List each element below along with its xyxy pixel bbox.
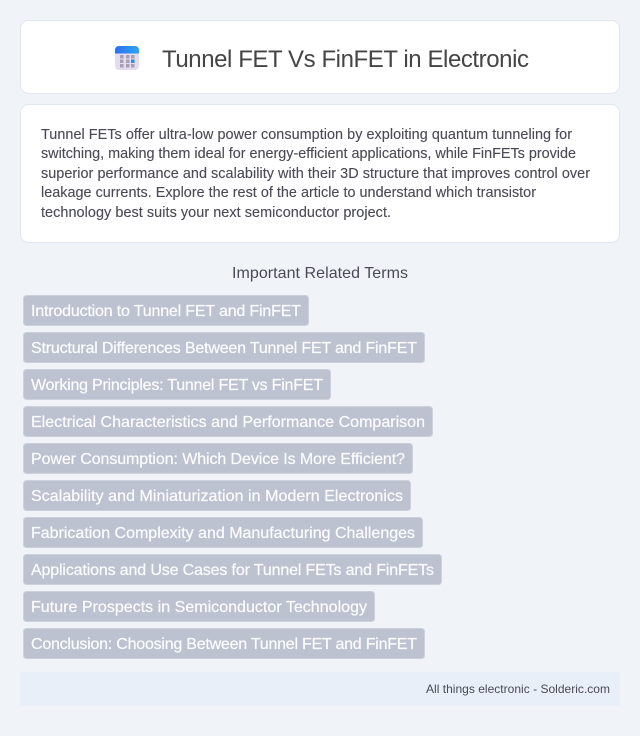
tag 1: Introduction to Tunnel FET and FinFET — [31, 303, 301, 320]
tag 3 — [24, 370, 330, 400]
footer — [20, 672, 620, 706]
summary text: technology best suits your next semiconductor project. — [41, 205, 391, 221]
tag 9: Future Prospects in Semiconductor Technology — [31, 599, 367, 616]
tag 6 — [24, 480, 410, 510]
summary text — [41, 127, 590, 221]
tag 4 — [24, 406, 432, 436]
tag 3: Working Principles: Tunnel FET vs FinFET — [31, 377, 323, 394]
tag 2: Structural Differences Between Tunnel FET and FinFET — [31, 340, 417, 357]
tag 4: Electrical Characteristics and Performance Comparison — [31, 414, 425, 431]
tag 7: Fabrication Complexity and Manufacturing Challenges — [31, 525, 415, 542]
tag 1 — [24, 296, 308, 326]
heading: related terms: Important Related Terms — [232, 265, 408, 282]
tag 10 — [24, 628, 424, 658]
title: Tunnel FET Vs FinFET in Electronic — [162, 46, 529, 73]
footer credit: All things electronic - Solderic.com — [426, 682, 610, 696]
tag 5: Power Consumption: Which Device Is More Efficient? — [31, 451, 405, 468]
summary text: superior performance and scalability with their 3D structure that improves control over — [41, 166, 590, 182]
summary text: leakage currents. Explore the rest of the article to understand which transistor — [41, 185, 536, 201]
tag 5 — [24, 444, 412, 474]
summary text: switching, making them ideal for energy-efficient applications, while FinFETs provide — [41, 146, 576, 162]
tag 2 — [24, 332, 424, 362]
tag 8 — [24, 554, 442, 584]
tag list — [24, 296, 442, 658]
tag 6: Scalability and Miniaturization in Modern Electronics — [31, 488, 403, 505]
tag 10: Conclusion: Choosing Between Tunnel FET and FinFET — [31, 636, 417, 653]
panel: title card — [20, 20, 620, 94]
tag 9 — [24, 592, 374, 622]
tag 7 — [24, 518, 422, 548]
summary text: Tunnel FETs offer ultra-low power consumption by exploiting quantum tunneling for — [41, 127, 572, 143]
tag 8: Applications and Use Cases for Tunnel FETs and FinFETs — [31, 562, 434, 579]
panel: summary paragraph — [20, 104, 620, 242]
icon: calendar — [115, 46, 139, 70]
